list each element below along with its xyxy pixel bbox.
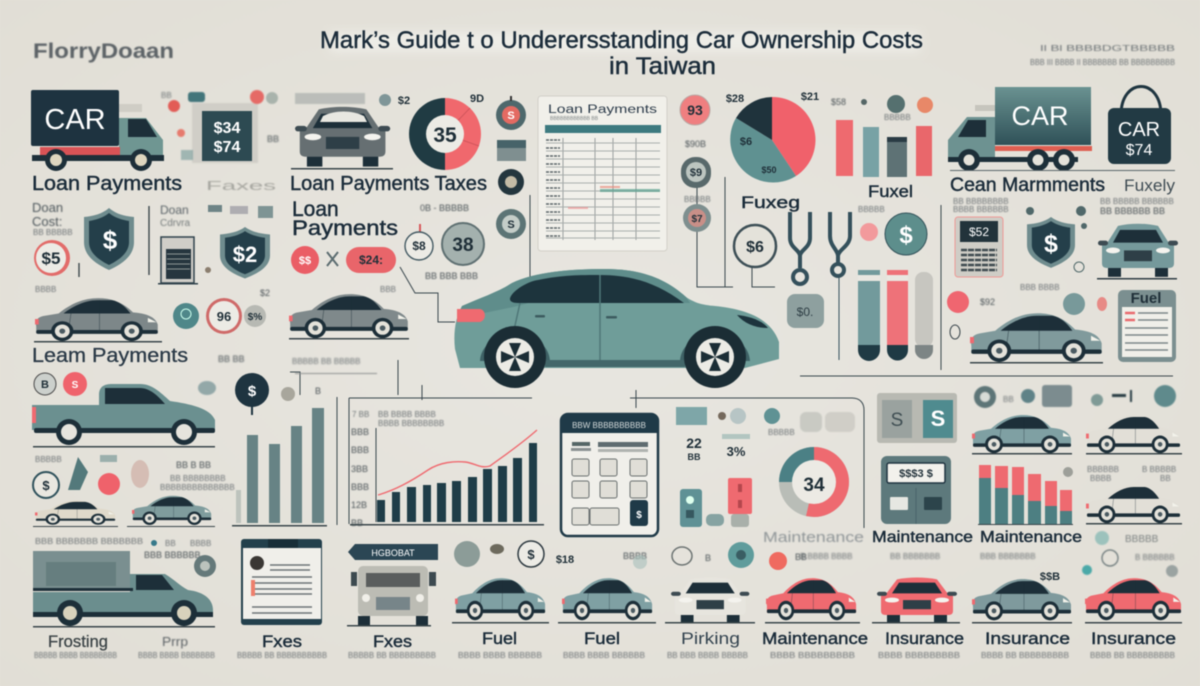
badges $8 and 38: 38 xyxy=(452,235,474,256)
panel: dark display: $$$3 $ xyxy=(899,468,933,480)
bottom car: teal 1: Fuel xyxy=(482,629,517,648)
bottom car: coral last: Insurance xyxy=(1091,629,1176,648)
icon: teal dollar coin: BBBBB xyxy=(858,205,885,214)
bottom car: white front: Pirking xyxy=(681,629,740,648)
panel: tile pair: S xyxy=(931,406,945,431)
chart: donut 35: $2 xyxy=(398,95,410,107)
heading: Cean Marmments: Cean Marmments xyxy=(950,175,1105,196)
right gauges column: $90B xyxy=(685,139,706,149)
icon: shield with dollar: $ xyxy=(103,225,118,255)
icon: teal dollar coin xyxy=(858,205,927,255)
small gauges, left: 96 xyxy=(217,309,231,324)
chart: pie: $50 xyxy=(761,165,777,175)
panel: loan payments table xyxy=(538,96,667,251)
panel: calculator, right: BBBB BBBBBB xyxy=(953,205,1009,214)
title: Mark’s Guide t o Underersstanding Car Ownership Costs xyxy=(320,27,923,54)
heading: Loan Payments two lines: Payments xyxy=(292,217,398,240)
small gauges, left: $% xyxy=(248,312,262,323)
heading: Loan Payments 1: Loan Payments xyxy=(32,173,182,195)
bottom car: coral front: BBBB BBBBBBBBB xyxy=(878,651,960,660)
panel: sedan teal, right: $92 xyxy=(980,297,995,307)
panel: pickup truck: S xyxy=(72,380,79,391)
panel: sedan teal, right xyxy=(947,283,1107,364)
divider row xyxy=(950,170,1175,171)
chart: pie: $6 xyxy=(740,136,752,148)
small tiles above fobs: 22 xyxy=(686,435,702,451)
panel: calculator, right xyxy=(953,197,1009,277)
panel: sedan gray, mid left xyxy=(289,285,409,340)
badges $8 and 38: 0B - BBBBB xyxy=(420,203,469,213)
panel: calculator: $ xyxy=(636,510,642,521)
icon row above bottom cars xyxy=(454,541,807,570)
bottom car: coral: BBBB BBBBBBBBB xyxy=(770,651,855,660)
icon row above bottom cars: BBBB xyxy=(623,551,647,561)
panel: truck with CAR sign, right xyxy=(948,87,1092,171)
badges $8 and 38: BB BBB BBB xyxy=(425,271,478,281)
icon: shopping bag price: $74 xyxy=(1126,142,1152,159)
chart: column and trend line: 12B xyxy=(351,500,367,510)
heading: Fxes 1 xyxy=(237,632,327,660)
panel: price sign, left: $34 xyxy=(214,120,240,137)
top right fine print: BBB III BBBB II BBBBBBB BB BBBBBBBBB xyxy=(1030,58,1175,67)
vertical icon column xyxy=(496,96,526,239)
icon: key fobs xyxy=(680,478,752,527)
panel: front car teal, right: BB BBBBB BBBBBB xyxy=(1100,197,1174,206)
panel: loan payments table: Loan Payments xyxy=(548,104,657,116)
panel: Doan and device: Cdrvra xyxy=(160,218,190,229)
badges $8 and 38: $8 xyxy=(412,239,426,253)
panel: sedan teal, right: BBB BBBB xyxy=(1020,283,1060,292)
pills above donut xyxy=(800,412,855,432)
right gauges column xyxy=(680,95,711,232)
panel: calculator, right: BB BBBBBBBB xyxy=(953,197,1009,206)
panel: Doan cost xyxy=(32,200,79,277)
panel: delivery truck front xyxy=(347,544,438,626)
chart: pie: $21 xyxy=(801,91,819,103)
bottom car: teal 2: Fuel xyxy=(584,629,620,648)
panel: calculator: BBW BBBBBBBBBB xyxy=(572,421,646,430)
chart: pie: $28 xyxy=(726,93,744,105)
bottom car: coral last: BBBB BB BBBBBBBBB xyxy=(1090,651,1175,660)
bottom car: gray teal: BBBB BB BBBBBBBBB xyxy=(981,651,1069,660)
small icons top of left column xyxy=(198,354,377,395)
panel: sedan gray, left: BBBB xyxy=(35,285,56,294)
chart: upper bars: $58 xyxy=(831,97,846,107)
sedan white, upper right xyxy=(1086,415,1182,454)
bottom car: teal 1: BBBB BBBB BBBBBB xyxy=(458,651,542,660)
panel: van with cargo: BBB BBBBBBB BBBBBBB xyxy=(35,537,143,546)
bottom car: coral: Maintenance xyxy=(762,629,868,648)
panel: van with cargo: BBB BBBBBB xyxy=(144,550,201,560)
coral pills xyxy=(291,246,396,274)
bottom car: coral xyxy=(762,578,868,660)
panel: front car teal, right xyxy=(1097,197,1178,280)
heading: Fxes 2: BBBBB BB BBBBBBBBB xyxy=(348,651,436,660)
icons row under maintenance xyxy=(800,531,1178,577)
heading: Loan Payments Taxes: Loan Payments Taxes xyxy=(290,173,487,195)
small row: icons and little cars: BB B BB xyxy=(176,460,211,470)
coral pills: $$ xyxy=(299,255,311,267)
panel: Doan cost: Doan xyxy=(32,200,63,215)
icon row above bottom cars: $ xyxy=(527,547,535,562)
fine print and sedan white, mid right: BBBBBB xyxy=(1087,465,1119,474)
chart: column and trend line: BBB xyxy=(351,445,369,455)
tubes chart xyxy=(858,270,933,361)
small icons top of left column: BB BB xyxy=(218,354,245,364)
icon row above bottom cars: B xyxy=(705,553,711,563)
chart: column and trend line: BB BBBB BBBB xyxy=(378,410,436,419)
panel: Doan cost: Cost: xyxy=(32,214,62,229)
panel: Doan and device: Doan xyxy=(160,203,189,217)
small gauges, left xyxy=(173,288,270,334)
small icons, top left: BB xyxy=(161,91,172,100)
bottom car: coral front: Insurance xyxy=(885,629,964,648)
chart: stacked bars xyxy=(978,465,1073,525)
small row: icons and little cars: BB BBBBBBBB xyxy=(170,474,226,483)
panel: pickup truck xyxy=(32,372,215,448)
chart: donut 35: 35 xyxy=(433,124,457,147)
icon: shopping bag price xyxy=(1108,86,1171,164)
icons row under maintenance: BBB BBBBBBB xyxy=(980,552,1036,561)
chart: column and trend line: BB xyxy=(351,518,363,528)
bottom car: gray teal: $$B xyxy=(1040,571,1060,583)
chart: column and trend line: 3BB xyxy=(351,464,368,474)
icons row under maintenance: B BBBB BBBB xyxy=(800,552,852,561)
small icons, top left: BB xyxy=(267,134,279,144)
icon: shield dollar, right: $ xyxy=(1044,230,1058,258)
panel: clipboard document xyxy=(241,539,322,625)
panel: sedan gray, mid left: BBB xyxy=(380,285,396,294)
icons above right cars xyxy=(974,385,1176,408)
small row: icons and little cars xyxy=(33,455,235,527)
vertical icon column: S xyxy=(507,110,515,122)
badges $8 and 38 xyxy=(405,203,484,281)
labels under van xyxy=(34,632,215,660)
icon: shopping bag price: CAR xyxy=(1118,119,1160,141)
bottom car: coral front xyxy=(872,577,964,660)
labels under van: BBBB BBBB BBBBBBB xyxy=(138,651,215,660)
right gauges column: BBBBB xyxy=(684,195,711,204)
panel: delivery truck front: HGBOBAT xyxy=(371,548,415,558)
right gauges column: $7 xyxy=(691,214,703,225)
small icons top of left column: BBBBB BB BBBBB xyxy=(292,357,360,366)
heading: Loan Payments two lines: Loan xyxy=(292,198,339,221)
heading: Fxes 1: Fxes xyxy=(262,632,302,651)
chart: column and trend line: BBB xyxy=(351,427,369,437)
connector lines xyxy=(290,177,1173,528)
icon: forks and device xyxy=(787,212,850,360)
small tiles above fobs: BBBBB xyxy=(768,428,795,437)
chart: column and trend line xyxy=(349,398,544,528)
panel: truck with CAR sign, left xyxy=(31,90,164,171)
heading: Fuxeg: Fuxeg xyxy=(741,193,800,212)
top right fine print xyxy=(1030,44,1175,67)
bottom car: teal 2 xyxy=(558,578,656,660)
panel: Doan cost: BB BBBBB xyxy=(33,228,73,237)
panel: loan payments table: BBBBBBBBBBBB BB xyxy=(550,116,599,122)
heading: Fxes 2 xyxy=(348,632,436,660)
bottom car: teal 2: BBBB BBBB BBBBBB xyxy=(563,651,645,660)
chart: donut 34 xyxy=(779,447,849,517)
small gauges, left: $2 xyxy=(260,288,270,298)
chart: donut 35 xyxy=(398,93,484,170)
heading: Fxes 1: BBBBB BB BBBBBBBBBB xyxy=(237,651,327,660)
panel: truck with CAR sign, left: CAR xyxy=(44,104,106,136)
icon: shield dollar, right xyxy=(1026,206,1087,272)
chart: donut 34: 34 xyxy=(803,475,825,496)
heading: Leam Payments: Leam Payments xyxy=(32,345,188,367)
panel: van with cargo: BBBB xyxy=(190,539,211,548)
panel: truck with CAR sign, right: CAR xyxy=(1011,101,1069,131)
panel: price sign, left xyxy=(192,103,258,163)
icons row under maintenance: BBBBB xyxy=(1125,534,1159,545)
panel: front car teal, right: BB BBBBBB BB xyxy=(1100,206,1165,216)
panel: pickup truck: B xyxy=(41,379,49,391)
heading: faded Taxes: Faxes xyxy=(206,178,277,193)
panel: fuel doc xyxy=(1118,290,1176,362)
panel: sedan gray, left xyxy=(34,285,162,342)
icons above right cars: BB xyxy=(1003,395,1014,404)
chart: upper bars: BBBBB xyxy=(884,113,911,122)
panel: fuel doc: Fuel xyxy=(1131,290,1161,307)
icon: shield with dollar xyxy=(84,208,134,270)
chart: column and trend line: 7 BB xyxy=(352,410,369,419)
icons row under maintenance: BB BBBBBBB xyxy=(890,552,940,561)
badge: $5 ring: $6 xyxy=(746,239,764,256)
fine print and sedan white, mid right: BBBB xyxy=(1090,474,1111,483)
coral pills: $24: xyxy=(359,253,383,267)
badge: $5 ring xyxy=(734,225,776,267)
bottom car: gray teal xyxy=(972,571,1072,660)
labels under van: BBBBB BBBB BBBBBBBB xyxy=(34,651,117,660)
heading: Fuxely: Fuxely xyxy=(1124,176,1176,195)
chart: teal bars with pin: $ xyxy=(248,383,257,400)
icon row above bottom cars: BB xyxy=(795,552,807,562)
chart: column and trend line: BBB xyxy=(351,482,369,492)
panel: tile pair: S xyxy=(891,410,903,431)
heading: Fxes 2: Fxes xyxy=(373,632,412,651)
panel: van with cargo: BB xyxy=(165,539,176,548)
panel: dark display xyxy=(881,456,951,524)
bottom car: teal 1 xyxy=(452,578,549,660)
icon row above bottom cars: $18 xyxy=(556,554,574,566)
small row: icons and little cars: BBBBB xyxy=(35,455,62,464)
panel: Doan and device xyxy=(149,203,273,284)
fine print and sedan white, mid right: BB xyxy=(1160,474,1171,483)
panel: price sign, left: $74 xyxy=(214,139,240,156)
small tiles above fobs: BB xyxy=(688,452,701,462)
chart: donut 35: 9D xyxy=(470,93,484,105)
panel: front car gray, center left xyxy=(291,93,393,170)
small icons, top left xyxy=(161,90,279,160)
sedan teal, upper right xyxy=(972,415,1072,454)
vertical icon column: S xyxy=(507,219,515,231)
fine print and sedan white, mid right xyxy=(1063,465,1182,524)
small row: icons and little cars: BBBBBBBBBBBBBB xyxy=(160,483,235,492)
chart: teal bars with pin: B xyxy=(315,386,321,396)
heading: Fuxel: Fuxel xyxy=(868,182,913,201)
main car xyxy=(454,269,779,388)
heading: Maintenance 3: Maintenance xyxy=(980,529,1082,546)
heading: Maintenance 2: Maintenance xyxy=(872,529,973,546)
chart: column and trend line: BBBB BBBBBBBB xyxy=(378,419,444,428)
top right fine print: Il Bl BBBBDGTBBBBB xyxy=(1040,44,1175,53)
labels under van: Prrp xyxy=(162,634,188,649)
small tiles above fobs xyxy=(676,407,795,462)
title xyxy=(320,27,923,80)
icon: shield with $2: $2 xyxy=(233,242,257,267)
panel: tile pair xyxy=(877,393,957,443)
bottom car: coral last xyxy=(1085,578,1182,660)
panel: calculator, right: $52 xyxy=(969,225,989,239)
brand label: FlorryDoaan xyxy=(33,40,174,63)
icons row under maintenance: B BBBBBB xyxy=(1135,553,1175,562)
icon: forks and device: $0. xyxy=(797,305,813,319)
title: in Taiwan xyxy=(609,53,716,80)
panel: van with cargo xyxy=(33,537,216,628)
chart: teal bars with pin xyxy=(232,373,327,526)
small row: icons and little cars: $ xyxy=(42,478,50,493)
small tiles above fobs: 3% xyxy=(727,444,746,459)
panel: Doan cost: $5 xyxy=(42,249,60,268)
bottom car: white front xyxy=(665,577,755,660)
chart: upper bars xyxy=(831,95,933,177)
labels under van: Frosting xyxy=(48,632,108,651)
bottom car: gray teal: Insurance xyxy=(985,629,1070,648)
heading: Loan Payments two lines xyxy=(292,198,398,240)
icon: teal dollar coin: $ xyxy=(899,222,913,249)
right gauges column: 93 xyxy=(687,102,703,118)
fine print and sedan white, mid right: B BBBBB xyxy=(1142,465,1176,474)
bottom car: white front: BB BBB BBBB BBBBB xyxy=(667,651,748,660)
heading: faded Maintenance: Maintenance xyxy=(763,529,864,546)
chart: pie xyxy=(726,91,819,183)
right gauges column: $9 xyxy=(690,167,702,179)
panel: calculator xyxy=(561,414,658,536)
icon: shield with $2 xyxy=(220,227,270,278)
